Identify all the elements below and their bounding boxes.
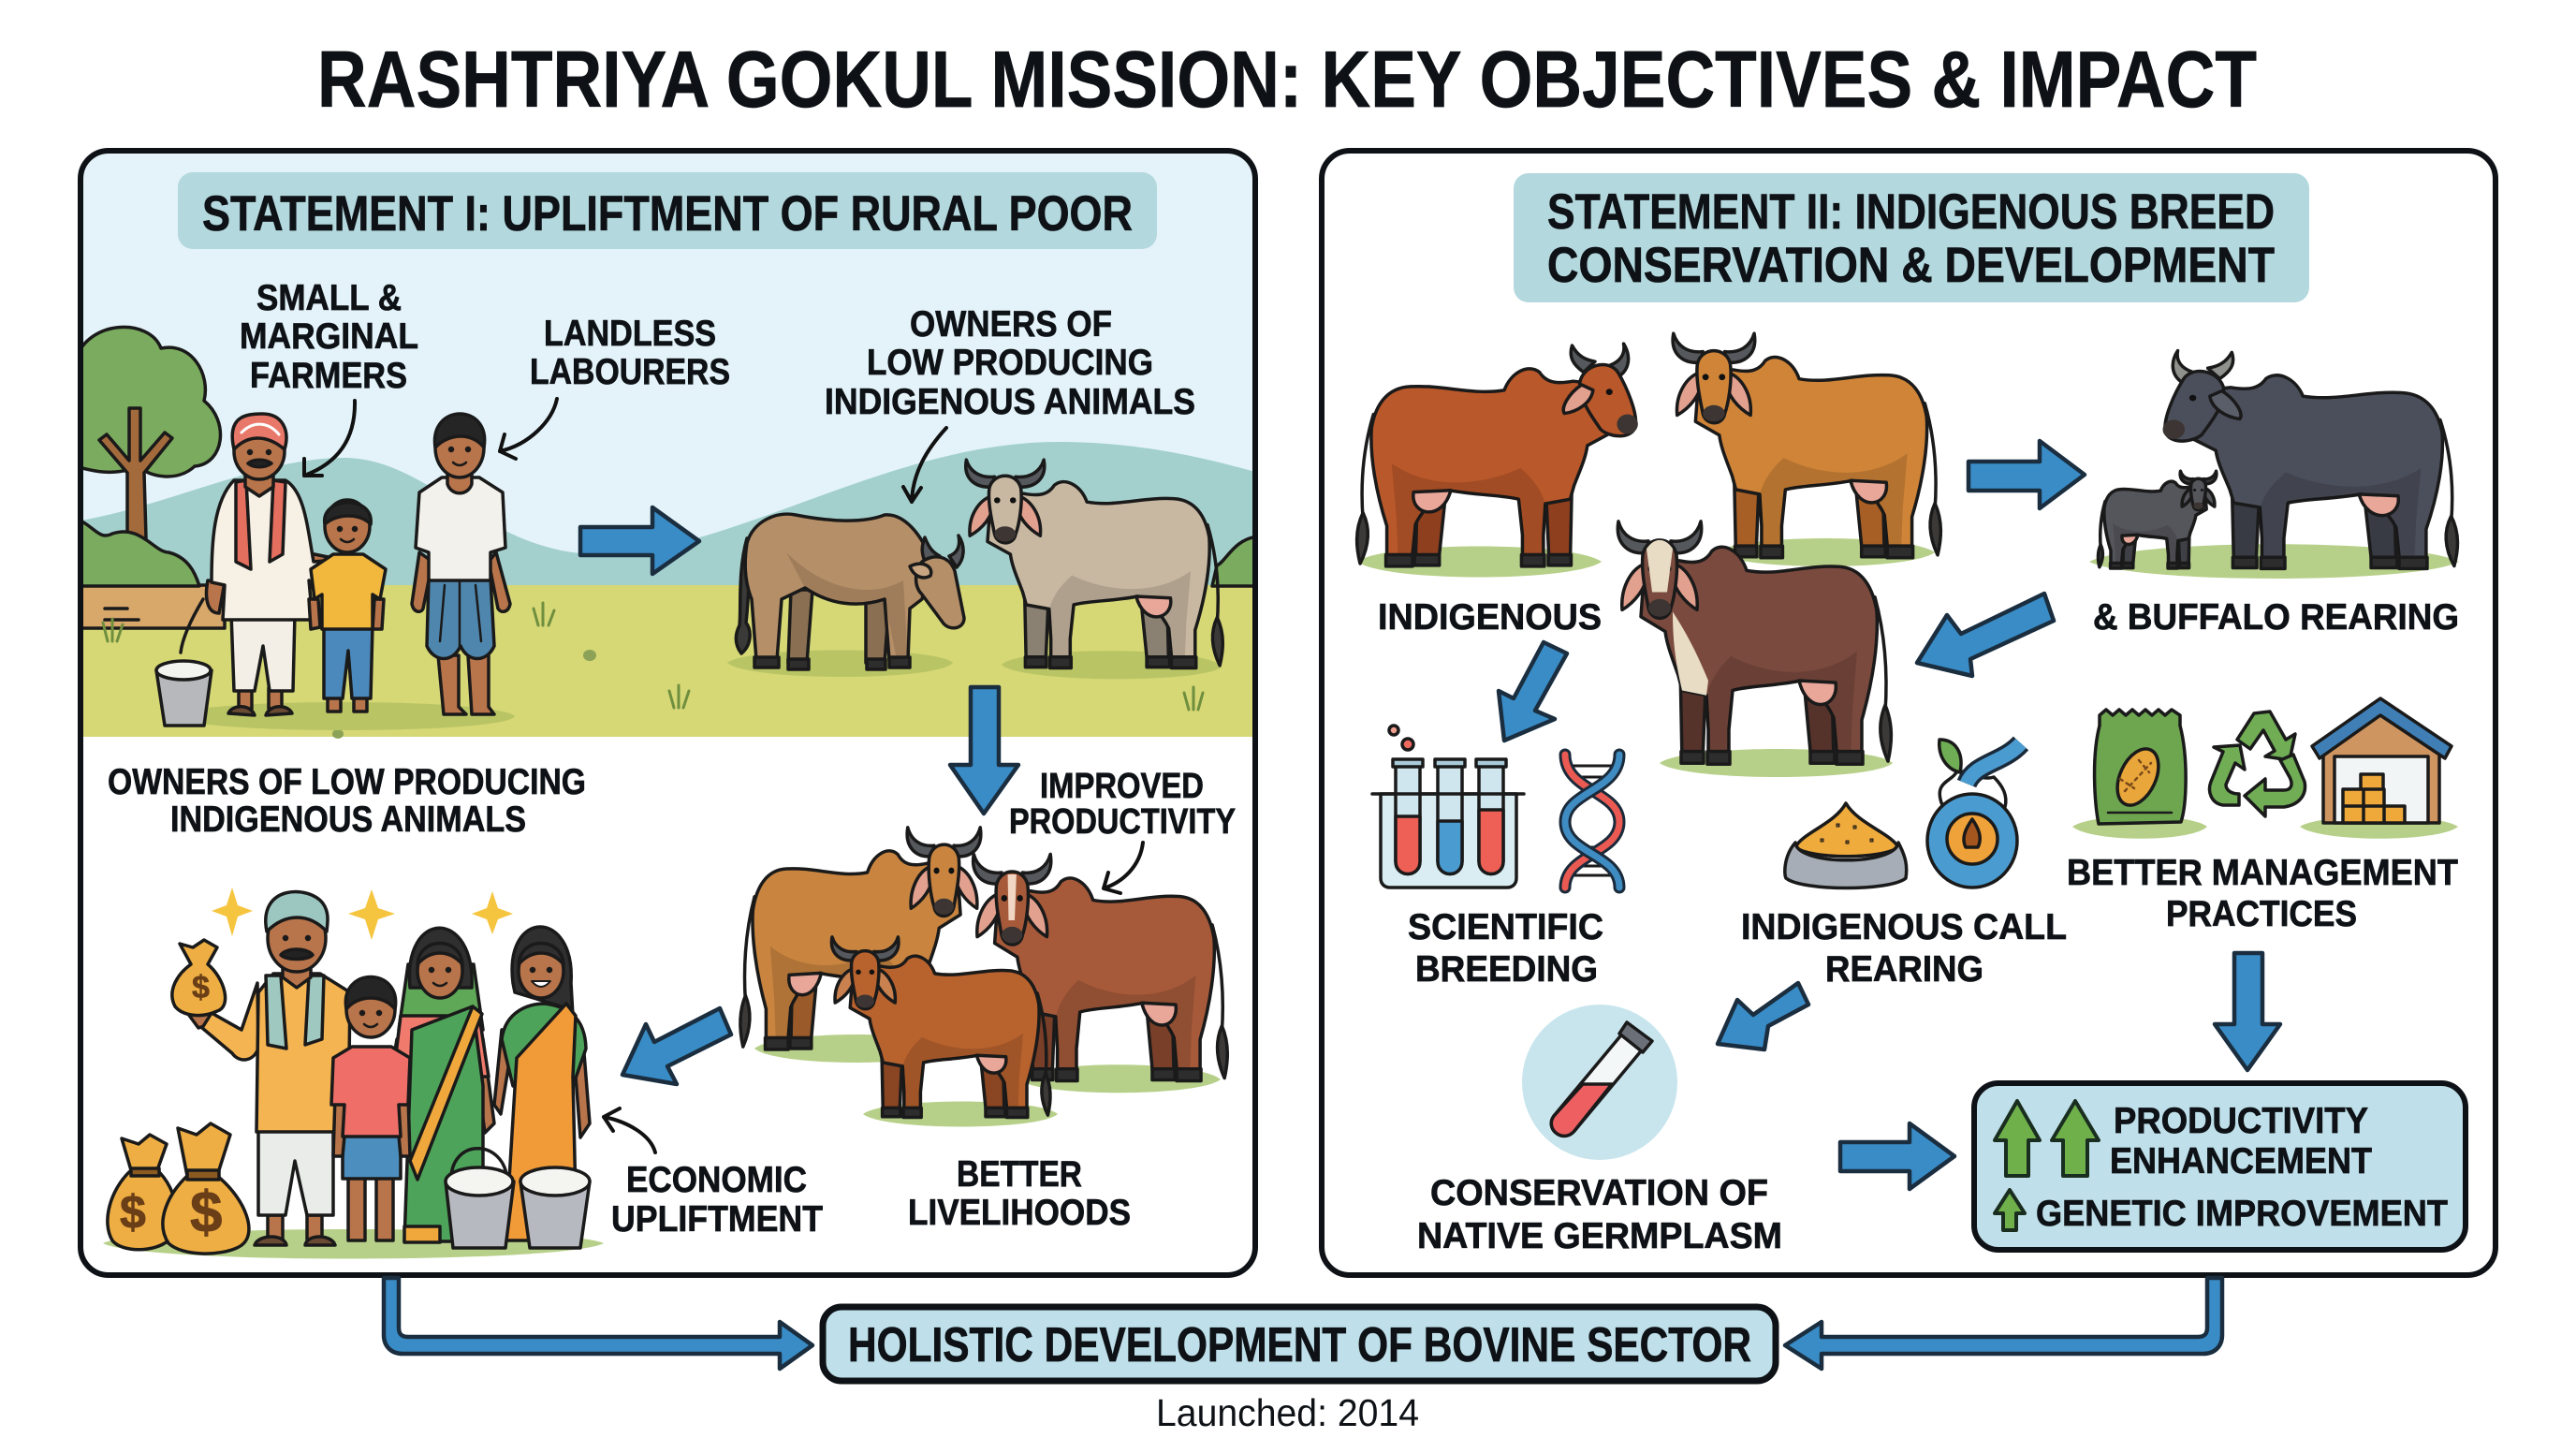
arrow: to low producing cattle: [580, 507, 699, 574]
label: landless labourers: [530, 314, 730, 392]
panel 1 border: [80, 151, 1255, 1275]
arrow: management to results: [2215, 953, 2280, 1070]
woman in orange saree: [494, 927, 590, 1240]
green up arrows: [1995, 1101, 2099, 1230]
label: owners of low producing indigenous animals: [825, 304, 1195, 422]
label: landless labourers: LABOURERS: [530, 352, 730, 392]
launch note: Launched: 2014: [1156, 1391, 1419, 1434]
label: owners, lower section: INDIGENOUS ANIMALS: [170, 800, 526, 840]
arrow: to results box: [1840, 1123, 1954, 1189]
results box: GENETIC IMPROVEMENT: [2036, 1194, 2448, 1234]
pointer: to animals: [903, 428, 946, 502]
holistic development box: HOLISTIC DEVELOPMENT OF BOVINE SECTOR: [848, 1318, 1751, 1372]
cow: healthy orange: [740, 828, 981, 1049]
label: improved productivity: IMPROVED: [1040, 767, 1204, 806]
label: owners of low producing indigenous animals: INDIGENOUS ANIMALS: [825, 382, 1195, 422]
icon: germplasm test tube in circle: [1522, 1005, 1677, 1160]
shadows under cattle: [1357, 538, 2459, 579]
arrow: down to improved productivity: [950, 687, 1018, 814]
label: economic upliftment: UPLIFTMENT: [611, 1199, 823, 1240]
label: indigenous calf rearing: REARING: [1825, 949, 1983, 990]
label: better livelihoods: LIVELIHOODS: [908, 1193, 1131, 1233]
buffalo: [2162, 351, 2457, 568]
label: indigenous calf rearing: [1741, 907, 2067, 990]
label: small and marginal farmers: SMALL &: [256, 278, 402, 318]
holistic development box: [823, 1307, 1776, 1381]
money bags: $: [120, 1186, 146, 1239]
connector: right panel to holistic box: [1785, 1278, 2222, 1369]
label: scientific breeding: SCIENTIFIC: [1408, 907, 1603, 947]
label: small and marginal farmers: FARMERS: [250, 356, 407, 396]
label: conservation of native germplasm: CONSERVATION OF: [1430, 1173, 1768, 1213]
shadows under low producing cattle: [727, 650, 1222, 679]
icon: recycle: [2210, 712, 2305, 816]
icon: DNA helix: [1565, 755, 1619, 888]
icon: milk bucket and rope: [156, 599, 212, 726]
arrow: to scientific breeding: [1499, 642, 1567, 741]
money bag held: $: [192, 970, 210, 1005]
cow: brown and white indigenous: [1617, 521, 1891, 764]
arrow: to economic upliftment: [622, 1008, 731, 1084]
icon: test tubes: [1372, 726, 1524, 888]
shadows under management icons: [2072, 816, 2458, 839]
buffalo calf: [2098, 471, 2217, 568]
label: better management practices: PRACTICES: [2166, 894, 2357, 934]
label: conservation of native germplasm: [1417, 1173, 1782, 1256]
cow: thin grey-beige: [966, 460, 1222, 668]
label: better livelihoods: [908, 1154, 1131, 1233]
icon: calf feeding bottle: [1927, 740, 2021, 888]
shadow under brown cow: [1660, 749, 1893, 777]
title: RASHTRIYA GOKUL MISSION: KEY OBJECTIVES & IMPACT: [317, 36, 2257, 125]
label: improved productivity: PRODUCTIVITY: [1009, 802, 1236, 842]
label: landless labourers: LANDLESS: [544, 314, 716, 354]
money bags: $: [190, 1181, 222, 1245]
header: statement I: [178, 172, 1157, 249]
label: small and marginal farmers: [240, 278, 418, 396]
label: better livelihoods: BETTER: [957, 1154, 1082, 1195]
header: statement II: [1514, 173, 2309, 302]
arrow: from buffalo to brown cow: [1917, 594, 2054, 676]
boy: [331, 977, 410, 1240]
pointer: to improved cattle: [1104, 843, 1143, 893]
label: small and marginal farmers: MARGINAL: [240, 316, 418, 357]
header: statement II: CONSERVATION & DEVELOPMENT: [1547, 238, 2275, 293]
milk buckets: [446, 1149, 590, 1248]
figure: child: [309, 500, 386, 712]
label: owners, lower section: OWNERS OF LOW PRODUCING: [108, 762, 586, 802]
results box: [1974, 1083, 2466, 1250]
results box: PRODUCTIVITY: [2114, 1101, 2368, 1141]
label: economic upliftment: ECONOMIC: [626, 1160, 807, 1200]
cow: grazing brown: [736, 514, 964, 669]
label: owners of low producing indigenous animals: OWNERS OF: [910, 304, 1112, 345]
cow: red-brown indigenous: [1357, 344, 1638, 566]
shadows under people: [173, 702, 515, 730]
icon: feed bowl: [1785, 803, 1907, 888]
label: scientific breeding: BREEDING: [1415, 949, 1598, 990]
label: scientific breeding: [1408, 907, 1603, 990]
figure: labourer: [412, 414, 510, 714]
results box: ENHANCEMENT: [2110, 1141, 2372, 1181]
woman in green saree: [386, 928, 494, 1242]
money bag held: [172, 940, 226, 1016]
label: buffalo rearing: & BUFFALO REARING: [2093, 597, 2459, 638]
arrow: to germplasm: [1718, 983, 1808, 1049]
calf: brown: [831, 937, 1050, 1118]
man: [183, 892, 350, 1245]
label: owners, lower section: [108, 762, 586, 840]
cow: healthy red: [973, 854, 1227, 1080]
pointer: to labourers: [500, 399, 557, 459]
rural landscape background: [75, 151, 1259, 739]
connector: left panel to holistic box: [384, 1278, 812, 1369]
label: owners of low producing indigenous animals: LOW PRODUCING: [867, 343, 1153, 383]
family with sparkles: [103, 888, 604, 1258]
label: better management practices: [2067, 853, 2458, 934]
label: improved productivity: [1009, 767, 1236, 842]
label: economic upliftment: [611, 1160, 823, 1240]
shadows under improved cattle: [754, 1034, 1221, 1127]
pointer: to family: [604, 1108, 655, 1152]
figure: farmer: [206, 414, 354, 715]
panel: statement II: [1322, 151, 2496, 1275]
header: statement II: STATEMENT II: INDIGENOUS BREED: [1547, 184, 2275, 240]
label: better management practices: BETTER MANAGEMENT: [2067, 853, 2458, 893]
panel: statement I: [75, 151, 1259, 1275]
label: conservation of native germplasm: NATIVE GERMPLASM: [1417, 1216, 1782, 1256]
icon: feed bag: [2095, 710, 2186, 824]
label: indigenous: INDIGENOUS: [1378, 597, 1602, 638]
sparkles: [212, 888, 513, 940]
ground shadow: [103, 1229, 604, 1258]
money bags: [108, 1123, 249, 1254]
cow: orange indigenous: [1673, 333, 1940, 558]
icon: barn store: [2312, 698, 2452, 823]
pointer: to farmers: [304, 401, 355, 476]
header: statement I: STATEMENT I: UPLIFTMENT OF RURAL POOR: [202, 186, 1133, 242]
arrow: to buffalo: [1969, 441, 2085, 508]
label: indigenous calf rearing: INDIGENOUS CALL: [1741, 907, 2067, 947]
